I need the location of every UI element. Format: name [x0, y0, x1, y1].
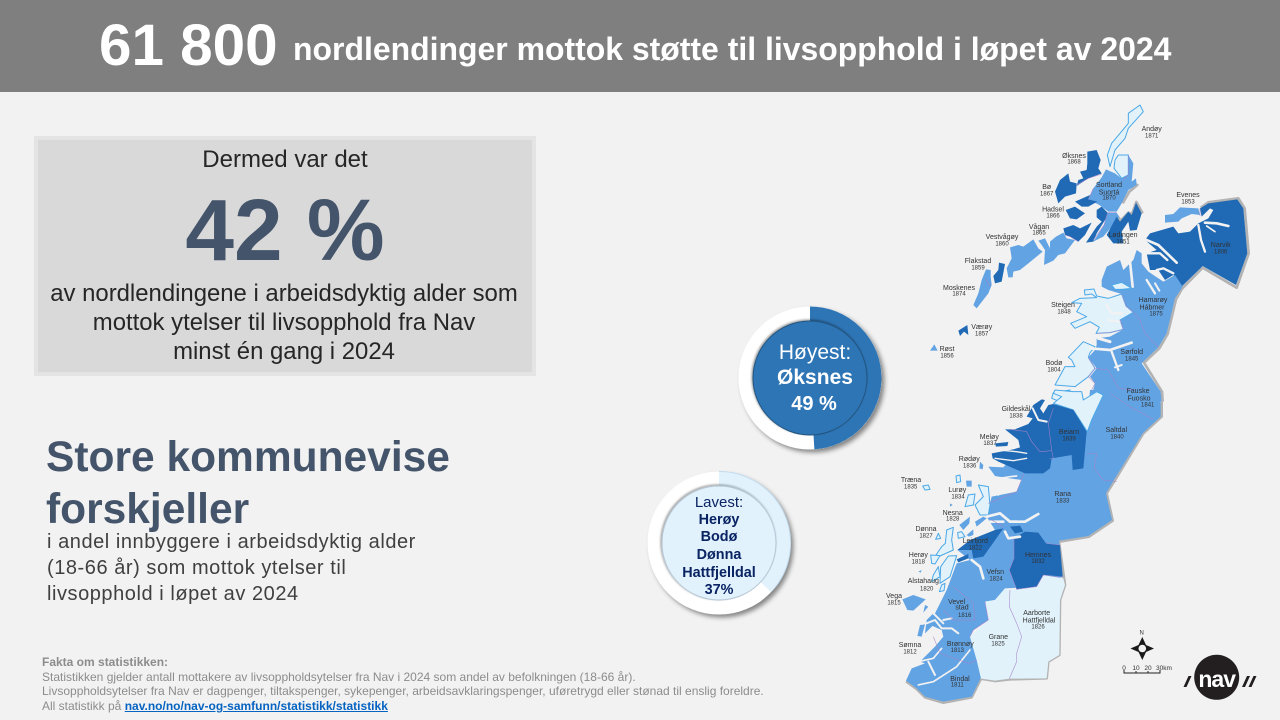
- panel intro text: Dermed var det: [202, 146, 368, 173]
- label: Sørfold: 1845: [1125, 357, 1139, 363]
- label: Dønna: 1827: [919, 534, 933, 540]
- label: Grane: Grane: [989, 634, 1008, 641]
- label: Meløy: 1837: [983, 441, 997, 447]
- label: Vågan: 1865: [1032, 231, 1046, 237]
- label: Evenes: 1853: [1181, 200, 1195, 206]
- footnote: facts about the statistics: Fakta om statistikken:: [42, 655, 168, 669]
- footnote: facts about the statistics: [42, 655, 764, 713]
- label: Hamarøy: 1875: [1149, 312, 1163, 318]
- label: Leirfjord: 1822: [969, 546, 983, 552]
- label: Narvik: 1806: [1214, 250, 1228, 256]
- section description: i andel innbyggere i arbeidsdyktig alder: [47, 531, 416, 553]
- label: Herøy: 1818: [912, 560, 926, 566]
- label: Beiarn: Beiarn: [1059, 429, 1079, 436]
- label: Værøy: 1857: [975, 331, 989, 337]
- label: Gildeskål: 1838: [1009, 414, 1023, 420]
- label: Øksnes: 1868: [1067, 160, 1081, 166]
- panel description: mottok ytelser til livsopphold fra Nav: [93, 309, 475, 336]
- map: Hamarøy, Steigen, Sørfold and Bodø: [1052, 250, 1183, 402]
- label: Bø: 1867: [1040, 192, 1054, 198]
- section description: livsopphold i løpet av 2024: [47, 583, 299, 605]
- map labels: [886, 126, 1231, 689]
- label: Nesna: 1828: [946, 517, 960, 523]
- scale bar: 20: [1144, 665, 1152, 672]
- label: Moskenes: Moskenes: [943, 285, 975, 292]
- label: Rana: 1833: [1056, 499, 1070, 505]
- icon: compass rose: [1130, 631, 1154, 660]
- footnote: facts about the statistics: Livsoppholdsytelser fra Nav er dagpenger, tiltakspenger, sykepenger, arbeidsavklaringspenger, uføretrygd eller stønad til enslig foreldre.: [42, 684, 764, 698]
- label: Steigen: Steigen: [1051, 302, 1075, 309]
- label: Leirfjord: Leirfjord: [963, 538, 988, 545]
- label: Narvik: Narvik: [1211, 242, 1231, 249]
- label: Evenes: Evenes: [1176, 192, 1200, 199]
- label: Sømna: Sømna: [899, 642, 921, 649]
- scale bar: 30km: [1156, 665, 1172, 672]
- section description: [47, 531, 416, 605]
- map: Værøy and Røst: [930, 325, 968, 351]
- label: Alstahaug: Alstahaug: [908, 578, 939, 585]
- panel description: [50, 280, 518, 365]
- label: Sortland: Sortland: [1096, 182, 1122, 189]
- label: Bindal: Bindal: [950, 676, 970, 683]
- label: Hattfjelldal: 1826: [1031, 625, 1045, 631]
- header banner: [0, 0, 1280, 92]
- label: Røst: Røst: [940, 346, 954, 353]
- label: Sørfold: Sørfold: [1120, 349, 1143, 356]
- label: Gildeskål: Gildeskål: [1002, 406, 1030, 413]
- label: Hattfjelldal: Hattfjelldal: [1023, 617, 1056, 624]
- panel description: av nordlendingene i arbeidsdyktig alder som: [50, 280, 518, 307]
- headline number: 61 800: [99, 13, 278, 78]
- label: Saltdal: Saltdal: [1106, 427, 1127, 434]
- donut: lowest municipalities: Lavest:: [695, 494, 743, 511]
- donut: highest municipality: Høyest:: [779, 341, 851, 364]
- label: Værøy: Værøy: [971, 324, 992, 331]
- map: Andøy, Vesterålen and Lødingen: [1055, 105, 1143, 243]
- label: Rana: Rana: [1054, 491, 1071, 498]
- label: Fauske: Fauske: [1127, 388, 1149, 395]
- label: Andøy: Andøy: [1142, 126, 1162, 133]
- label: Lødingen: 1851: [1116, 240, 1130, 246]
- donut: highest municipality: Øksnes: [777, 366, 853, 389]
- label: Bodø: 1804: [1047, 368, 1061, 374]
- label: Bø: Bø: [1042, 184, 1051, 191]
- label: Træna: Træna: [901, 477, 921, 484]
- label: Hemnes: 1832: [1031, 559, 1045, 565]
- donut: highest municipality: 49 %: [791, 393, 837, 415]
- label: Sortland: 1870: [1102, 196, 1116, 202]
- donut: lowest municipalities: [648, 471, 796, 620]
- label: Rødøy: Rødøy: [959, 456, 980, 463]
- label: Vestvågøy: Vestvågøy: [986, 234, 1018, 241]
- section heading: Store kommunevise: [46, 434, 450, 481]
- headline text: nordlendinger mottok støtte til livsopphold i løpet av 2024: [293, 31, 1171, 67]
- donut: lowest municipalities: Hattfjelldal: [682, 565, 756, 581]
- section heading: [46, 434, 450, 533]
- label: Hamarøy: Hábmer: [1140, 304, 1165, 311]
- donut: lowest municipalities: Dønna: [697, 547, 742, 563]
- label: Sortland: Suortá: [1099, 189, 1119, 196]
- label: Vågan: Vågan: [1029, 224, 1049, 231]
- label: Øksnes: Øksnes: [1062, 153, 1086, 160]
- label: Meløy: Meløy: [980, 434, 999, 441]
- label: Saltdal: 1840: [1110, 434, 1124, 440]
- big number 42 %: 42 %: [185, 181, 385, 279]
- map of Nordland municipalities: [886, 104, 1256, 704]
- label: Bindal: 1811: [951, 683, 964, 689]
- map: Salten, Helgeland mainland and southern coast: [902, 390, 1162, 703]
- label: Nesna: Nesna: [943, 510, 963, 517]
- label: Brønnøy: Brønnøy: [947, 641, 974, 648]
- label: Bodø: Bodø: [1046, 360, 1062, 367]
- label: Alstahaug: 1820: [920, 586, 934, 592]
- donut: highest municipality: [738, 306, 888, 456]
- label: Lødingen: Lødingen: [1108, 232, 1138, 239]
- label: Brønnøy: 1813: [951, 648, 965, 654]
- label: Vevelstad: Vevel: [948, 599, 965, 606]
- donut: lowest municipalities: Bodø: [701, 529, 738, 545]
- label: Vevelstad: stad: [955, 604, 969, 611]
- section heading: forskjeller: [46, 486, 249, 533]
- section description: (18-66 år) som mottok ytelser til: [47, 557, 346, 579]
- label: Moskenes: 1874: [952, 292, 966, 298]
- label: Fauske: Fuosko: [1128, 395, 1151, 402]
- footnote: facts about the statistics: Statistikken gjelder antall mottakere av livsoppholdsytelser fra Nav i 2024 som andel av befolkningen (18-66 år).: [42, 670, 636, 684]
- logo: Nav: [1184, 655, 1256, 700]
- label: Vega: Vega: [886, 593, 902, 600]
- label: Flakstad: Flakstad: [965, 258, 991, 265]
- label: Røst: 1856: [940, 354, 954, 360]
- label: Hamarøy: Hamarøy: [1139, 297, 1167, 304]
- label: Andøy: 1871: [1145, 134, 1159, 140]
- label: Herøy: Herøy: [909, 552, 928, 559]
- panel description: minst én gang i 2024: [173, 338, 395, 365]
- footnote: facts about the statistics: All statistikk på nav.no/no/nav-og-samfunn/statistikk/statistikk: [42, 699, 388, 713]
- panel: 42 percent key figure: [34, 136, 536, 376]
- label: Hadsel: Hadsel: [1042, 206, 1064, 214]
- label: Hadsel: 1866: [1046, 214, 1060, 220]
- label: Vefsn: 1824: [989, 577, 1003, 583]
- label: Dønna: Dønna: [915, 526, 937, 533]
- logo: Nav: nav: [1198, 666, 1236, 692]
- scale bar: 10: [1132, 665, 1140, 672]
- donut: lowest municipalities: 37%: [705, 582, 734, 598]
- label: Lurøy: Lurøy: [948, 487, 966, 494]
- map: Lofoten islands: [973, 223, 1092, 308]
- map: Evenes and Narvik: [1145, 198, 1249, 289]
- label: Fauske: 1841: [1141, 403, 1155, 409]
- label: Steigen: 1848: [1057, 310, 1071, 316]
- donut: lowest municipalities: Herøy: [699, 512, 739, 528]
- label: Vestvågøy: 1860: [995, 242, 1009, 248]
- label: Hemnes: Hemnes: [1025, 552, 1051, 559]
- label: Flakstad: 1859: [971, 266, 985, 272]
- label: Hattfjelldal: Aarborte: [1023, 610, 1050, 617]
- scale bar: 0: [1122, 665, 1126, 672]
- label: Lurøy: 1834: [951, 495, 965, 501]
- label: Rødøy: 1836: [963, 464, 977, 470]
- label: Grane: 1825: [991, 642, 1005, 648]
- scale bar: [1122, 665, 1172, 673]
- label: Vefsn: Vefsn: [987, 569, 1004, 576]
- icon: compass rose: N: [1140, 631, 1144, 637]
- label: Træna: 1835: [904, 485, 918, 491]
- label: Sømna: 1812: [903, 650, 917, 656]
- label: Beiarn: 1839: [1062, 437, 1076, 443]
- label: Vega: 1815: [887, 601, 901, 607]
- label: Vevelstad: 1816: [958, 613, 972, 619]
